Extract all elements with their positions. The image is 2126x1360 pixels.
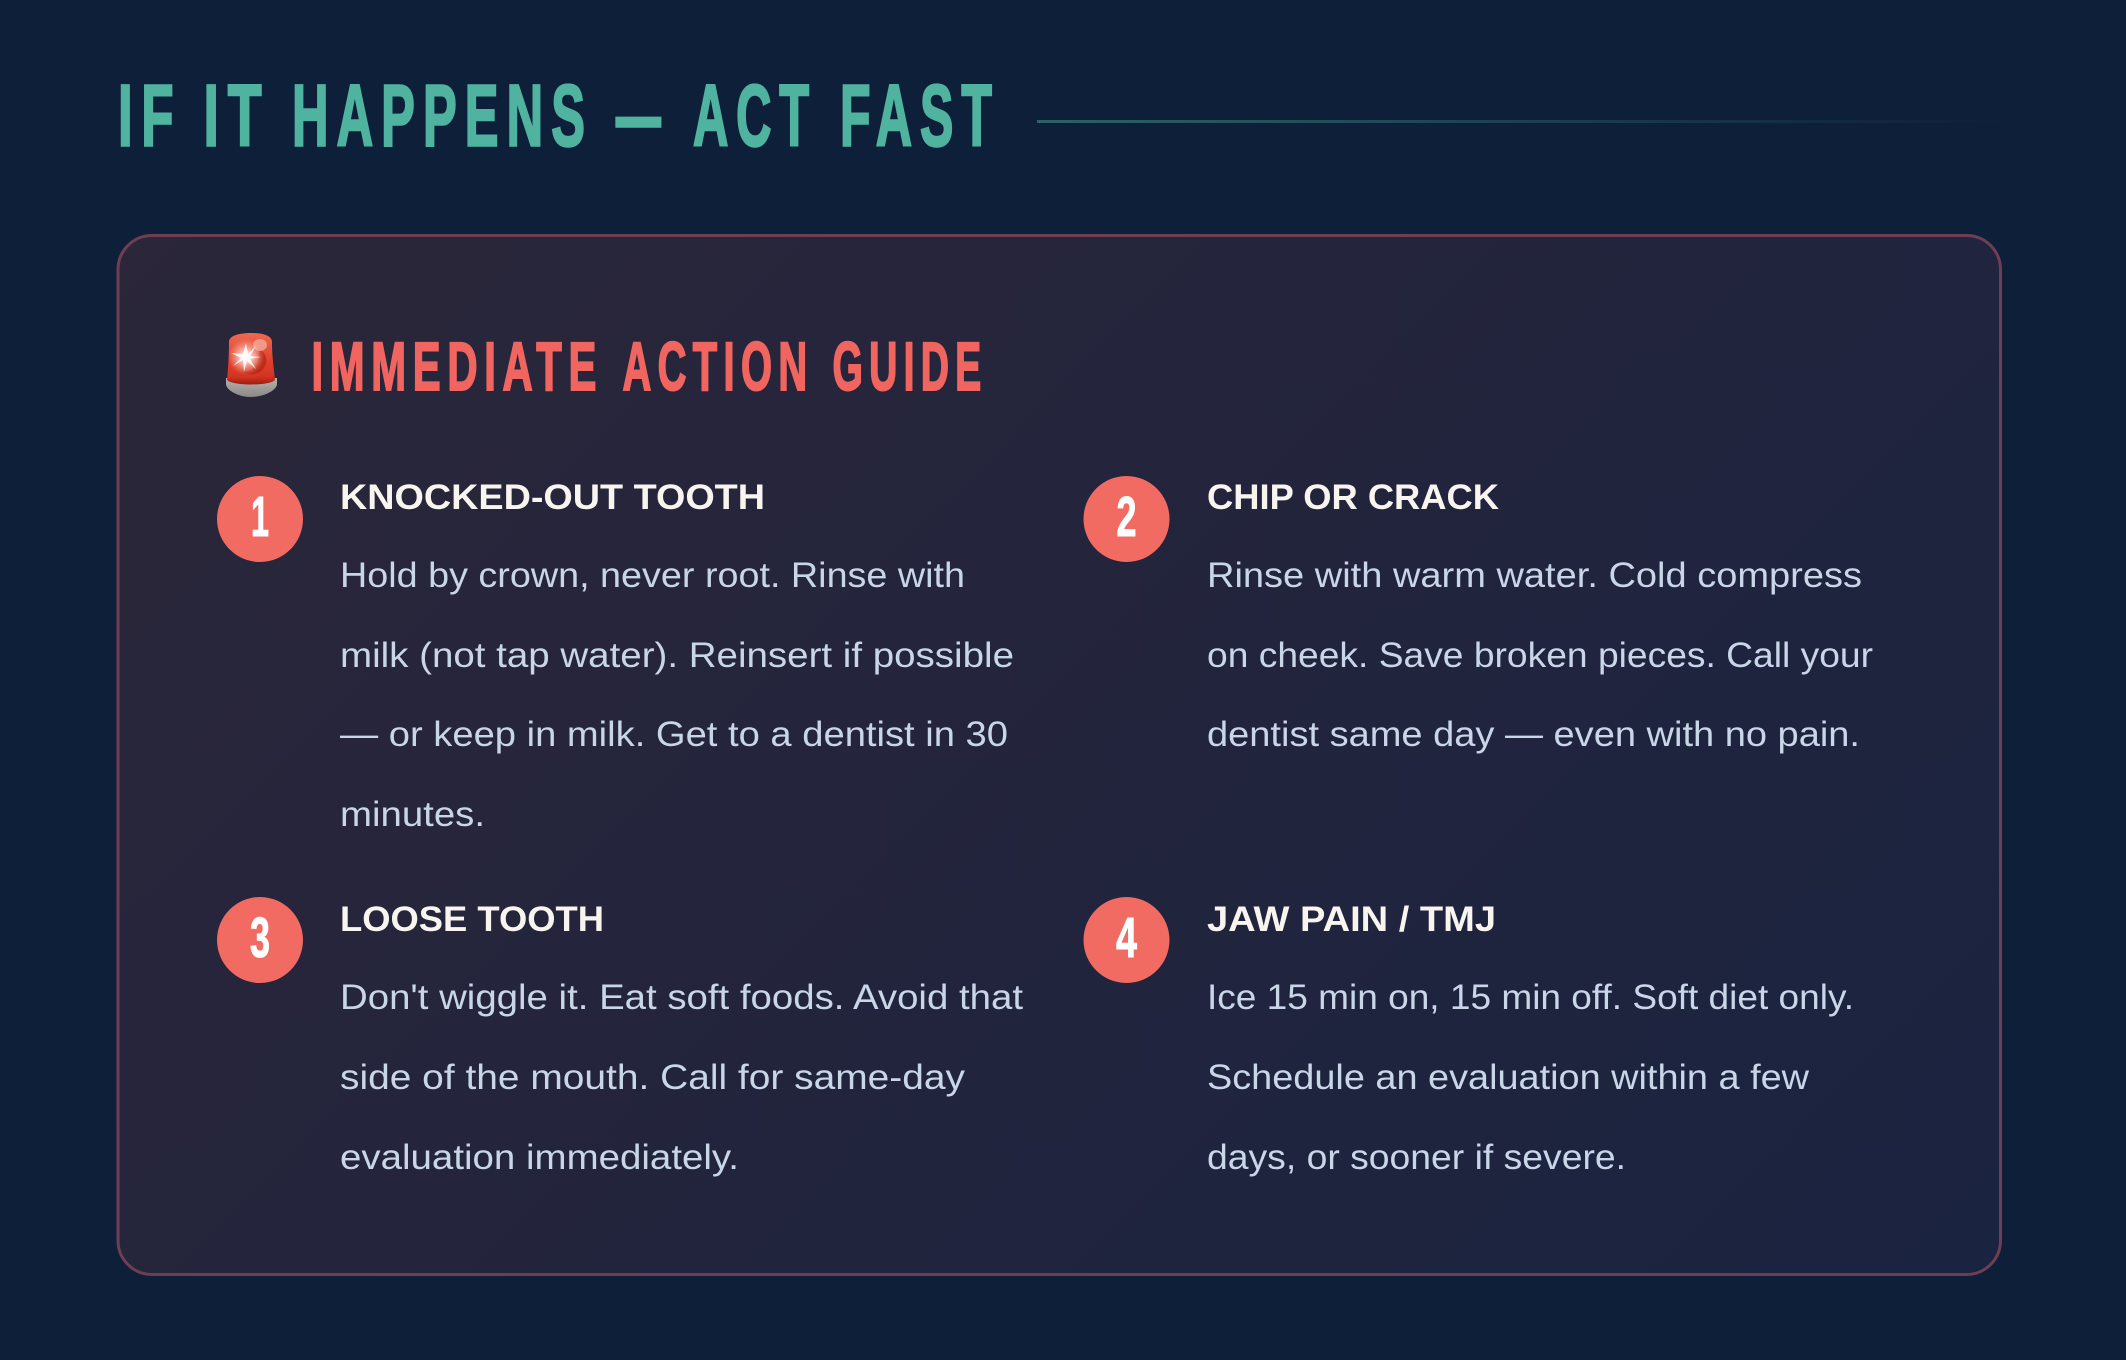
section title: — (616, 68, 668, 164)
number badge 4: 4 (1116, 906, 1137, 970)
step 3 description (340, 978, 1023, 1177)
step 3 heading: LOOSE TOOTH (340, 899, 604, 939)
panel: immediate action guide (118, 236, 2000, 1274)
step 1 description (340, 556, 1014, 834)
step 4 heading: JAW PAIN / TMJ (1207, 899, 1496, 939)
step 1 description: minutes. (340, 795, 485, 834)
step 4: jaw pain / tmj (1084, 897, 1854, 1177)
step 3 description: evaluation immediately. (340, 1138, 739, 1177)
section title: FAST (840, 68, 1000, 164)
step 2 description: dentist same day — even with no pain. (1207, 715, 1860, 754)
panel heading: IMMEDIATE (312, 328, 603, 405)
section title: ACT (693, 68, 817, 164)
number badge 1: 1 (251, 485, 269, 549)
step 4 description: days, or sooner if severe. (1207, 1138, 1626, 1177)
section title: IF (118, 68, 182, 164)
number badge 1 (217, 476, 303, 562)
step 1: knocked-out tooth (217, 476, 1014, 834)
step 4 description (1207, 978, 1854, 1177)
icon: siren (226, 333, 277, 397)
step 2 heading: CHIP OR CRACK (1207, 477, 1499, 517)
step 3: loose tooth (217, 897, 1023, 1177)
step 1 description: milk (not tap water). Reinsert if possible (340, 636, 1014, 675)
step 2 description: on cheek. Save broken pieces. Call your (1207, 636, 1873, 675)
step 2 description: Rinse with warm water. Cold compress (1207, 556, 1862, 595)
section title: IT (204, 68, 270, 164)
number badge 3 (217, 897, 303, 983)
step 2: chip or crack (1084, 476, 1873, 754)
step 1 description: — or keep in milk. Get to a dentist in 30 (340, 715, 1008, 754)
step 3 description: Don't wiggle it. Eat soft foods. Avoid that (340, 978, 1023, 1017)
number badge 3: 3 (250, 906, 270, 970)
section title (118, 68, 1000, 164)
panel heading: ACTION (622, 328, 814, 405)
section title: HAPPENS (292, 68, 593, 164)
panel background (118, 236, 2000, 1274)
step 1 description: Hold by crown, never root. Rinse with (340, 556, 965, 595)
step 4 description: Schedule an evaluation within a few (1207, 1058, 1810, 1097)
panel heading: GUIDE (832, 328, 988, 405)
step 3 description: side of the mouth. Call for same-day (340, 1058, 966, 1097)
step 4 description: Ice 15 min on, 15 min off. Soft diet only. (1207, 978, 1854, 1017)
number badge 2 (1084, 476, 1170, 562)
step 2 description (1207, 556, 1873, 754)
number badge 2: 2 (1116, 485, 1136, 549)
title rule (1037, 120, 2002, 123)
number badge 4 (1084, 897, 1170, 983)
step 1 heading: KNOCKED-OUT TOOTH (340, 477, 765, 517)
